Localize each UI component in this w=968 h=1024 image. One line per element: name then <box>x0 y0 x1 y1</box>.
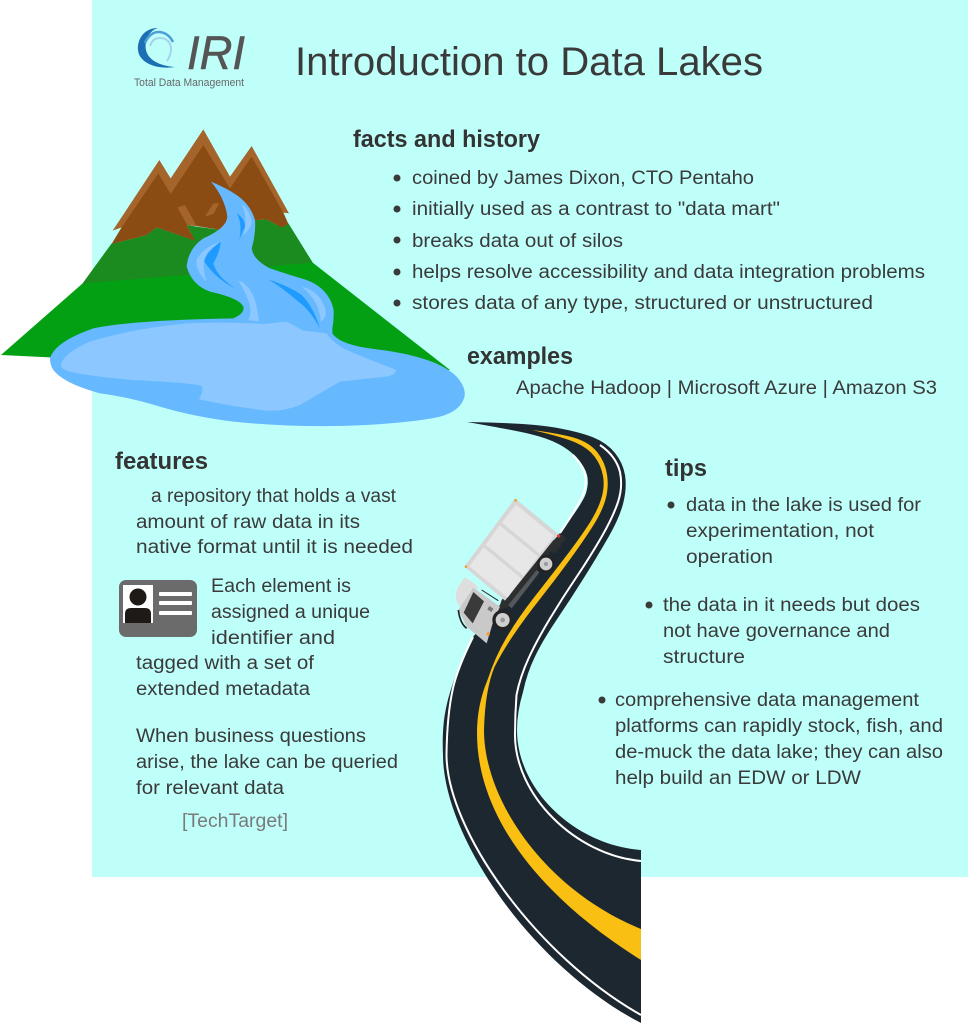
section: examples: Apache Hadoop | Microsoft Azure | Amazon S3 <box>516 378 937 399</box>
bullet list: stores data of any type, structured or unstructured <box>412 293 873 314</box>
section: tips: tips <box>665 455 707 482</box>
background panel <box>92 0 968 877</box>
tip 2: structure <box>663 647 745 668</box>
logo: IRI: Total Data Management <box>134 77 244 89</box>
truck <box>456 498 566 643</box>
cab window <box>464 592 484 623</box>
section: tips <box>598 455 943 789</box>
section: features: a repository that holds a vast <box>151 486 397 507</box>
cargo box <box>464 498 558 601</box>
section: features: native format until it is needed <box>136 537 413 558</box>
river highlights <box>196 203 326 324</box>
brown mountain faces <box>112 145 288 244</box>
lake shallows <box>61 322 396 411</box>
section: features: assigned a unique <box>211 602 370 623</box>
section: features: When business questions <box>136 726 366 747</box>
lights <box>487 632 490 636</box>
green hillside <box>1 223 450 387</box>
dark green slope <box>83 219 313 283</box>
tip 3 <box>598 690 943 789</box>
box panels <box>469 505 554 598</box>
tip 2: the data in it needs but does <box>663 595 920 616</box>
wind fairing <box>456 578 479 610</box>
icon: ID card <box>119 580 197 637</box>
section: examples <box>467 343 937 399</box>
logo: IRI <box>134 26 245 89</box>
tip 3: de-muck the data lake; they can also <box>615 742 943 763</box>
white edge lines <box>446 445 641 1015</box>
illustration: mountains, river and lake <box>1 129 465 426</box>
section: features: arise, the lake can be queried <box>136 752 398 773</box>
bullet list: initially used as a contrast to "data mart" <box>412 199 780 220</box>
section: features: [TechTarget] <box>182 811 288 832</box>
tip 2: not have governance and <box>663 621 890 642</box>
cab <box>458 588 500 643</box>
bullet list: breaks data out of silos <box>412 231 623 252</box>
tip 2 <box>646 595 920 668</box>
road <box>443 422 641 1023</box>
section: features: features <box>115 448 208 475</box>
bullet list: coined by James Dixon, CTO Pentaho <box>412 168 754 189</box>
lake <box>50 318 465 426</box>
tip 3: comprehensive data management <box>615 690 920 711</box>
bullet list <box>394 168 925 314</box>
brown mountain highlights <box>112 129 289 244</box>
tip 1: experimentation, not <box>686 521 875 542</box>
tip 3: platforms can rapidly stock, fish, and <box>615 716 943 737</box>
section: features: Each element is <box>211 576 351 597</box>
section: features: identifier and <box>211 628 335 649</box>
river <box>187 182 334 353</box>
tip 3: help build an EDW or LDW <box>615 768 861 789</box>
heading: facts and history <box>353 126 541 153</box>
bullet list: helps resolve accessibility and data integration problems <box>412 262 925 283</box>
yellow centre line <box>477 430 641 960</box>
section: features <box>115 448 413 832</box>
title: Introduction to Data Lakes <box>295 40 763 84</box>
tip 1: operation <box>686 547 773 568</box>
logo: IRI: IRI <box>187 26 245 79</box>
tip 1 <box>668 495 922 568</box>
chassis <box>498 534 566 610</box>
section: examples: examples <box>467 343 573 370</box>
section: facts and history <box>353 126 925 314</box>
section: features: tagged with a set of <box>136 653 315 674</box>
section: features: extended metadata <box>136 679 310 700</box>
tip 1: data in the lake is used for <box>686 495 922 516</box>
section: features: amount of raw data in its <box>136 512 360 533</box>
wheels <box>537 555 555 573</box>
road surface <box>443 422 641 1023</box>
section: features: for relevant data <box>136 778 284 799</box>
